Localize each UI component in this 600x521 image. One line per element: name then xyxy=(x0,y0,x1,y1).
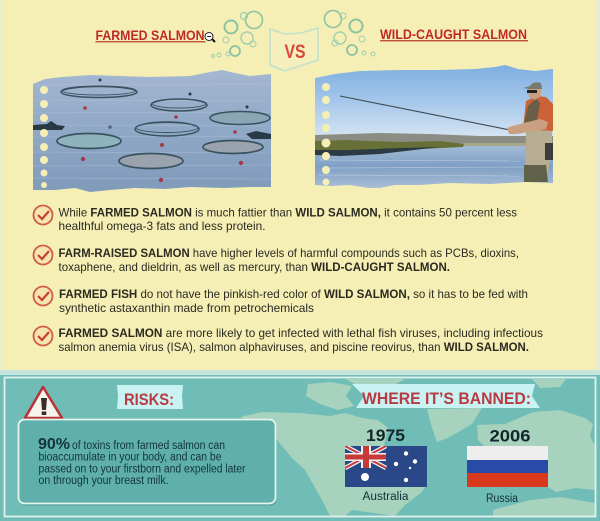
world map xyxy=(240,379,595,516)
angler xyxy=(507,82,553,182)
heading: farmed salmon: FARMED SALMON xyxy=(96,27,204,43)
frame xyxy=(4,378,596,516)
bullet 3: synthetic astaxanthin made from petrochemicals xyxy=(59,301,314,315)
bullet 1: healthful omega-3 fats and less protein. xyxy=(58,219,266,233)
label: Australia: Australia xyxy=(362,491,409,503)
year: 1975: 1975 xyxy=(366,426,405,445)
bullet 2 xyxy=(34,246,519,274)
photo: angler in river xyxy=(315,62,553,188)
bullet 4 xyxy=(34,326,543,354)
bullet 3: FARMED FISH do not have the pinkish-red color of WILD SALMON, so it has to be fed with xyxy=(59,287,528,301)
icon: magnifier cursor xyxy=(205,32,215,42)
heading: wild-caught salmon: WILD-CAUGHT SALMON xyxy=(380,26,527,42)
icon: VS badge: VS xyxy=(284,42,306,63)
callout: 90 percent of toxins: passed on to your firstborn and expelled later xyxy=(38,464,246,476)
fish pens xyxy=(57,86,270,168)
bullet 1: While FARMED SALMON is much fattier than WILD SALMON, it contains 50 percent less xyxy=(58,206,517,220)
icon: notebook holes left xyxy=(40,86,48,188)
icon: bubbles right xyxy=(324,10,375,56)
year: 2006: 2006 xyxy=(490,426,530,446)
icon: notebook holes right xyxy=(322,83,330,186)
bullet 1 xyxy=(34,206,517,233)
bullet 2: FARM-RAISED SALMON have higher levels of harmful compounds such as PCBs, dioxins, xyxy=(58,246,519,260)
callout: 90 percent of toxins: of toxins from farmed salmon can xyxy=(72,440,225,452)
bullet 2: toxaphene, and dieldrin, as well as mercury, than WILD-CAUGHT SALMON. xyxy=(58,260,450,274)
heading: risks xyxy=(117,385,183,409)
icon: warning triangle xyxy=(25,387,62,418)
photo: salmon farm pens xyxy=(33,68,271,193)
panel: risks and bans xyxy=(0,370,600,521)
callout: 90 percent of toxins: on through your breast milk. xyxy=(38,475,168,487)
label: Russia: Russia xyxy=(486,493,519,505)
callout: 90 percent of toxins xyxy=(18,420,276,506)
flag: Russia xyxy=(467,446,548,487)
bullet 4: salmon anemia virus (ISA), salmon alphaviruses, and piscine reovirus, than WILD SALMON. xyxy=(58,340,529,354)
icon: VS badge xyxy=(270,28,318,71)
callout: 90 percent of toxins: 90% xyxy=(38,436,70,453)
heading: where it's banned: WHERE IT’S BANNED: xyxy=(362,389,531,408)
icon: bubbles left xyxy=(212,12,262,58)
bullet list xyxy=(34,206,543,354)
bullet 3 xyxy=(34,286,528,315)
flag: Australia xyxy=(345,446,427,487)
callout: 90 percent of toxins: bioaccumulate in your body, and can be xyxy=(38,452,222,464)
heading: risks: RISKS: xyxy=(124,390,174,409)
bullet 4: FARMED SALMON are more likely to get infected with lethal fish viruses, including infectious xyxy=(58,326,543,340)
